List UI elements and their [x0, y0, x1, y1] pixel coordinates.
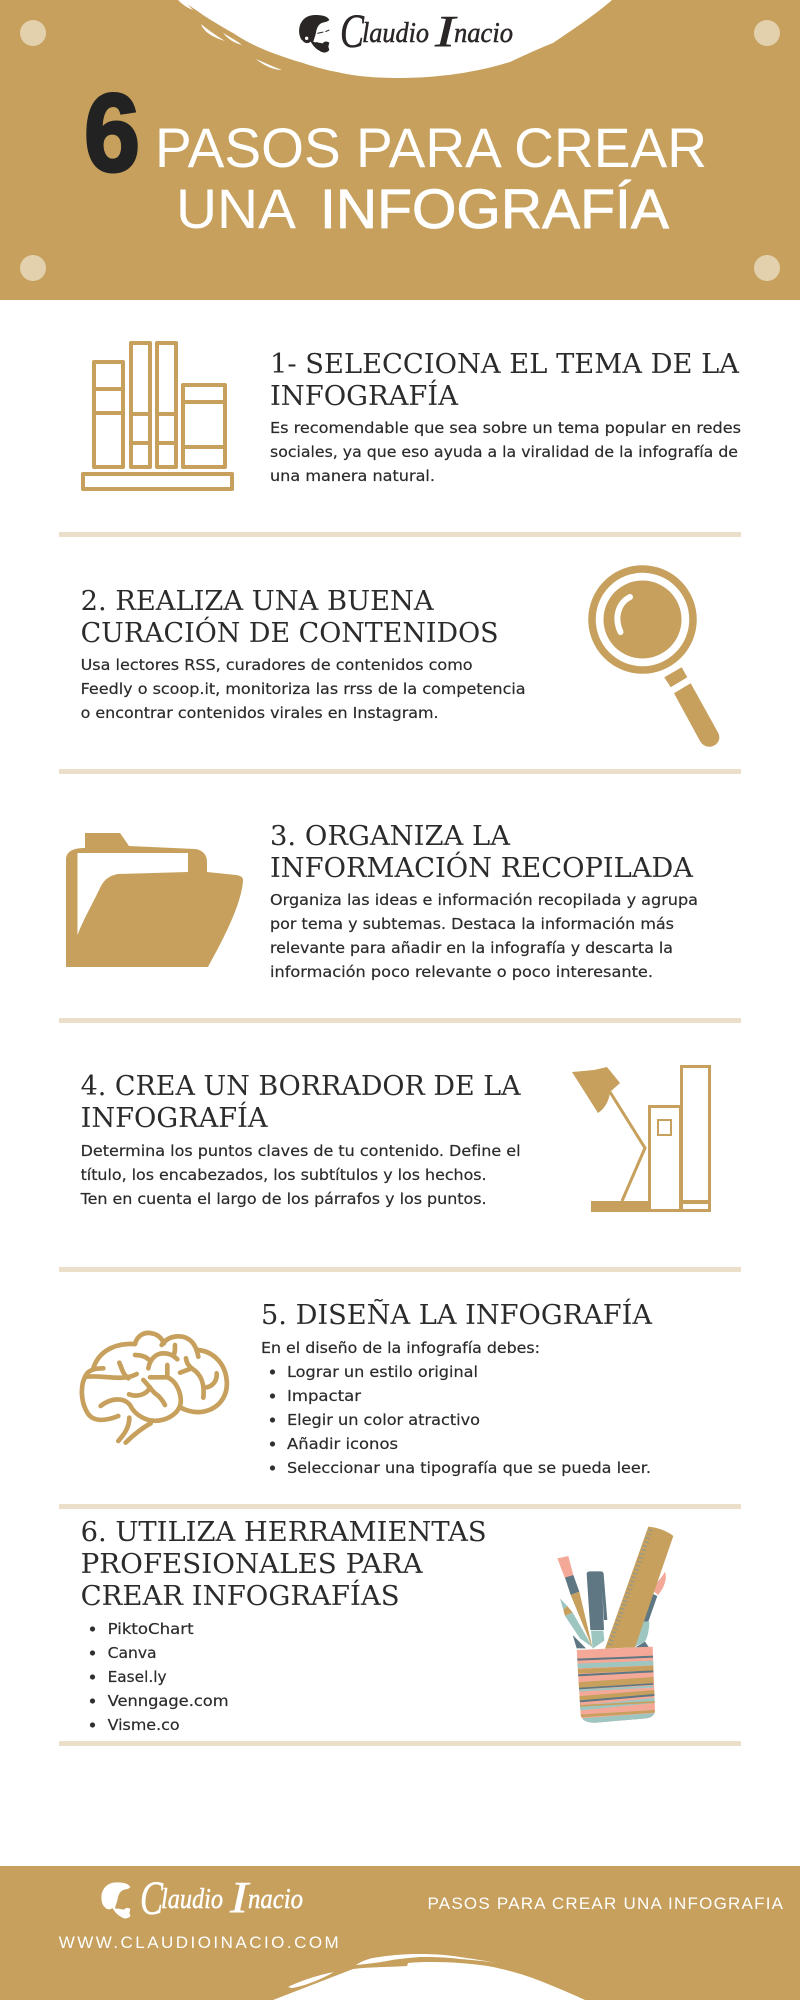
step 4 heading: INFOGRAFÍA: [81, 1101, 268, 1134]
panel: step 5: [82, 1297, 652, 1477]
step 3 text: por tema y subtemas. Destaca la información más: [270, 915, 674, 933]
logo wordmark: [340, 5, 513, 58]
footer logo wordmark: laudio: [161, 1884, 223, 1915]
footer white brush arc: [273, 1954, 585, 2000]
step 5 text: Seleccionar una tipografía que se pueda leer.: [287, 1459, 651, 1477]
logo: [299, 5, 513, 58]
footer website: WWW.CLAUDIOINACIO.COM: [59, 1933, 339, 1952]
panel: step 4: [80, 1066, 710, 1212]
step 6 list: Visme.co: [108, 1716, 180, 1734]
logo face: [299, 15, 329, 53]
footer logo wordmark: [140, 1872, 303, 1925]
step 6 heading: PROFESIONALES PARA: [81, 1549, 423, 1580]
step 1 heading: 1- SELECCIONA EL TEMA DE LA: [270, 349, 740, 380]
panel: step 2: [81, 569, 719, 747]
footer logo: [101, 1872, 303, 1925]
step 1 text: Es recomendable que sea sobre un tema popular en redes: [270, 419, 741, 437]
footer logo wordmark: I: [229, 1873, 251, 1922]
footer logo face: [101, 1882, 130, 1918]
icon: books on shelf: [83, 343, 232, 489]
step 5 text: [261, 1339, 651, 1477]
footer banner: [0, 1866, 800, 2000]
step 1 text: [270, 419, 741, 485]
step 3 heading: [270, 821, 693, 884]
header banner: [0, 0, 800, 300]
logo wordmark: C: [340, 5, 365, 58]
step 3 text: Organiza las ideas e información recopilada y agrupa: [270, 891, 698, 909]
step 3 heading: INFORMACIÓN RECOPILADA: [270, 850, 693, 884]
step 2 text: [81, 656, 526, 722]
step 6 list: Venngage.com: [108, 1692, 229, 1710]
title: INFOGRAFÍA: [320, 177, 670, 240]
step 6 list: [90, 1620, 229, 1734]
title number 6: 6: [84, 72, 140, 195]
icon: folder: [66, 833, 243, 967]
footer logo wordmark: C: [140, 1872, 164, 1925]
step 5 text: Añadir iconos: [287, 1435, 398, 1453]
icon: brain: [82, 1333, 227, 1443]
corner dots: [20, 20, 780, 281]
step 1 heading: [270, 349, 740, 412]
panel: step 6: [81, 1517, 673, 1734]
step 4 text: Ten en cuenta el largo de los párrafos y los puntos.: [80, 1190, 487, 1208]
step 3 heading: 3. ORGANIZA LA: [270, 821, 511, 852]
step 6 heading: 6. UTILIZA HERRAMIENTAS: [81, 1517, 487, 1548]
step 6 list: Easel.ly: [108, 1668, 167, 1686]
step 4 text: [80, 1142, 521, 1208]
title: [155, 116, 707, 240]
step 2 text: o encontrar contenidos virales en Instagram.: [81, 704, 439, 722]
step 6 heading: [81, 1517, 487, 1612]
panel: step 3: [66, 821, 698, 981]
step 3 text: información poco relevante o poco interesante.: [270, 963, 653, 981]
white brush arc: [178, 0, 612, 78]
footer tagline: PASOS PARA CREAR UNA INFOGRAFIA: [428, 1894, 784, 1913]
step 2 text: Feedly o scoop.it, monitoriza las rrss de la competencia: [81, 680, 526, 698]
step 5 text: Impactar: [287, 1387, 362, 1405]
step 5 heading: 5. DISEÑA LA INFOGRAFÍA: [261, 1297, 652, 1331]
icon: magnifying glass: [592, 569, 719, 747]
step 1 text: sociales, ya que eso ayuda a la viralidad de la infografía de: [270, 443, 738, 461]
panel: step 1: [83, 343, 741, 489]
title: UNA: [176, 177, 297, 240]
step 2 heading: CURACIÓN DE CONTENIDOS: [81, 615, 499, 649]
step 1 text: una manera natural.: [270, 467, 435, 485]
logo wordmark: nacio: [454, 18, 513, 49]
step 4 text: Determina los puntos claves de tu contenido. Define el: [81, 1142, 521, 1160]
icon: desk lamp and books: [572, 1066, 710, 1212]
step 5 text: Lograr un estilo original: [287, 1363, 478, 1381]
step 4 text: título, los encabezados, los subtítulos y los hechos.: [81, 1166, 487, 1184]
step 4 heading: [81, 1071, 521, 1134]
step 6 list: Canva: [108, 1644, 157, 1662]
step 3 text: [270, 891, 698, 981]
step 4 heading: 4. CREA UN BORRADOR DE LA: [81, 1071, 521, 1102]
step 3 text: relevante para añadir en la infografía y descarta la: [270, 939, 673, 957]
logo wordmark: I: [434, 7, 458, 56]
step 6 list: PiktoChart: [108, 1620, 194, 1638]
step 5 text: En el diseño de la infografía debes:: [261, 1339, 540, 1357]
logo wordmark: laudio: [362, 18, 429, 49]
title: PASOS PARA CREAR: [155, 116, 707, 179]
step 2 heading: 2. REALIZA UNA BUENA: [81, 586, 434, 617]
step 5 text: Elegir un color atractivo: [287, 1411, 480, 1429]
step 2 heading: [81, 586, 499, 649]
footer logo wordmark: nacio: [248, 1884, 303, 1915]
icon: pencil cup: [557, 1527, 673, 1727]
step 2 text: Usa lectores RSS, curadores de contenidos como: [81, 656, 473, 674]
step 6 heading: CREAR INFOGRAFÍAS: [81, 1579, 400, 1612]
step 1 heading: INFOGRAFÍA: [270, 379, 458, 412]
